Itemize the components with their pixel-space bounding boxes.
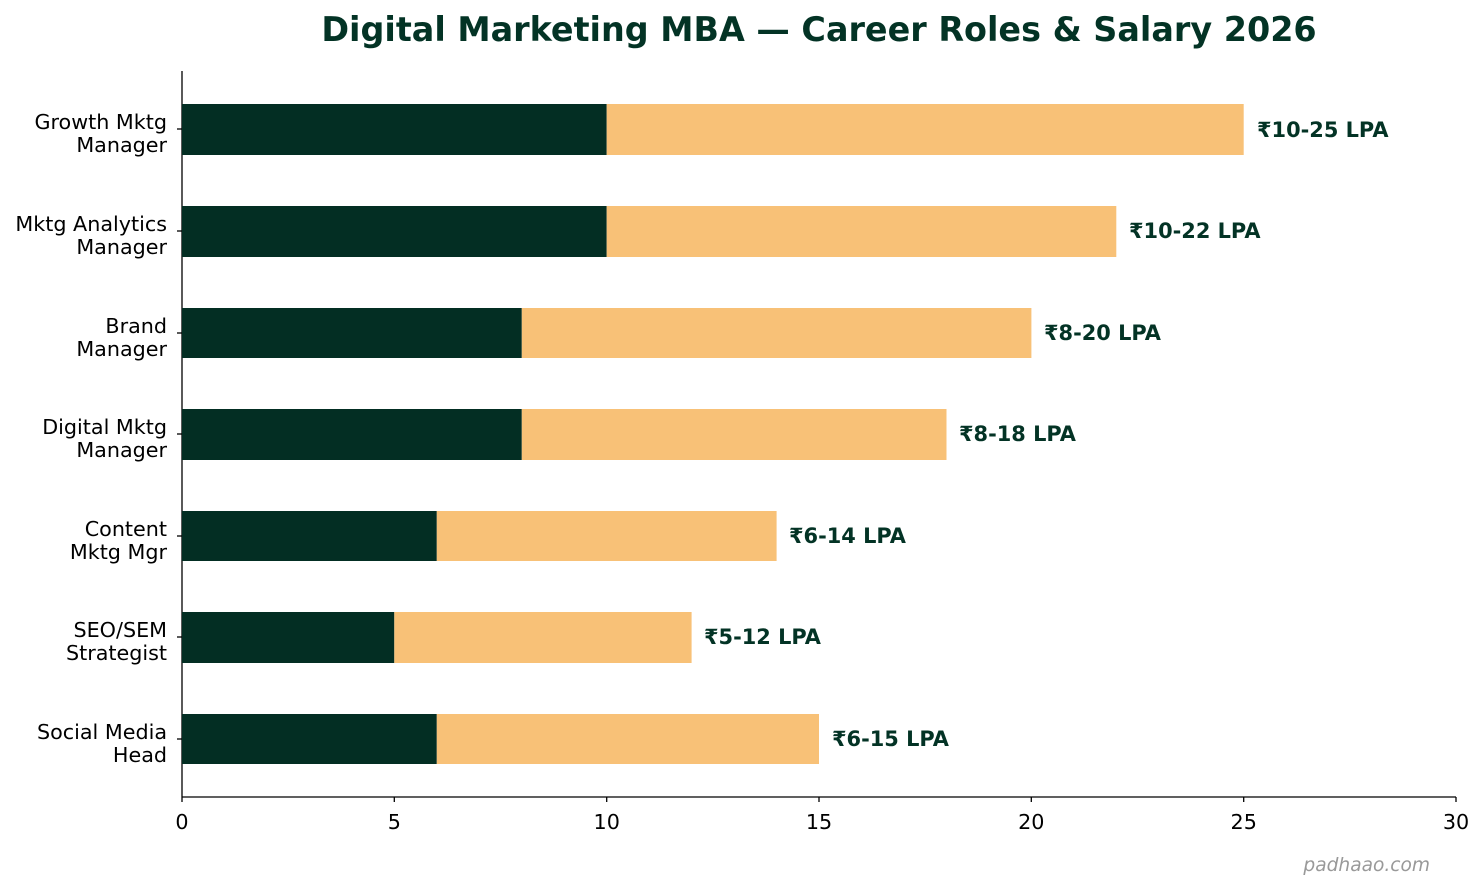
y axis labels: Manager: [76, 235, 167, 259]
y axis labels: Growth Mktg: [34, 110, 167, 134]
value labels: ₹5-12 LPA: [704, 625, 822, 649]
value labels: ₹8-18 LPA: [959, 422, 1077, 446]
value labels: [704, 118, 1389, 751]
x axis labels: 5: [388, 810, 401, 834]
watermark: padhaao.com: [1302, 855, 1430, 876]
y axis labels: [15, 110, 167, 767]
y axis labels: Mktg Mgr: [70, 540, 167, 564]
value labels: ₹6-15 LPA: [832, 727, 950, 751]
x axis labels: 25: [1231, 810, 1257, 834]
y axis labels: Manager: [76, 337, 167, 361]
y axis labels: Content: [85, 517, 167, 541]
value labels: ₹6-14 LPA: [789, 524, 907, 548]
y axis labels: Social Media: [37, 720, 167, 744]
x axis labels: [175, 810, 1469, 834]
value labels: ₹10-25 LPA: [1257, 118, 1389, 142]
x axis labels: 15: [806, 810, 832, 834]
y axis labels: Strategist: [66, 641, 167, 665]
x axis labels: 20: [1018, 810, 1044, 834]
axes: [177, 71, 1456, 802]
y axis labels: Digital Mktg: [42, 415, 167, 439]
y axis labels: Manager: [76, 133, 167, 157]
value labels: ₹8-20 LPA: [1044, 321, 1162, 345]
x axis labels: 30: [1443, 810, 1469, 834]
x axis labels: 0: [175, 810, 189, 834]
bar chart: [182, 104, 1244, 764]
y axis labels: Manager: [76, 438, 167, 462]
y axis labels: SEO/SEM: [73, 618, 167, 642]
y axis labels: Mktg Analytics: [15, 212, 167, 236]
value labels: ₹10-22 LPA: [1129, 219, 1261, 243]
y axis labels: Brand: [105, 314, 167, 338]
x axis labels: 10: [594, 810, 620, 834]
y axis labels: Head: [113, 743, 167, 767]
title: Digital Marketing MBA — Career Roles & Salary 2026: [321, 10, 1317, 49]
